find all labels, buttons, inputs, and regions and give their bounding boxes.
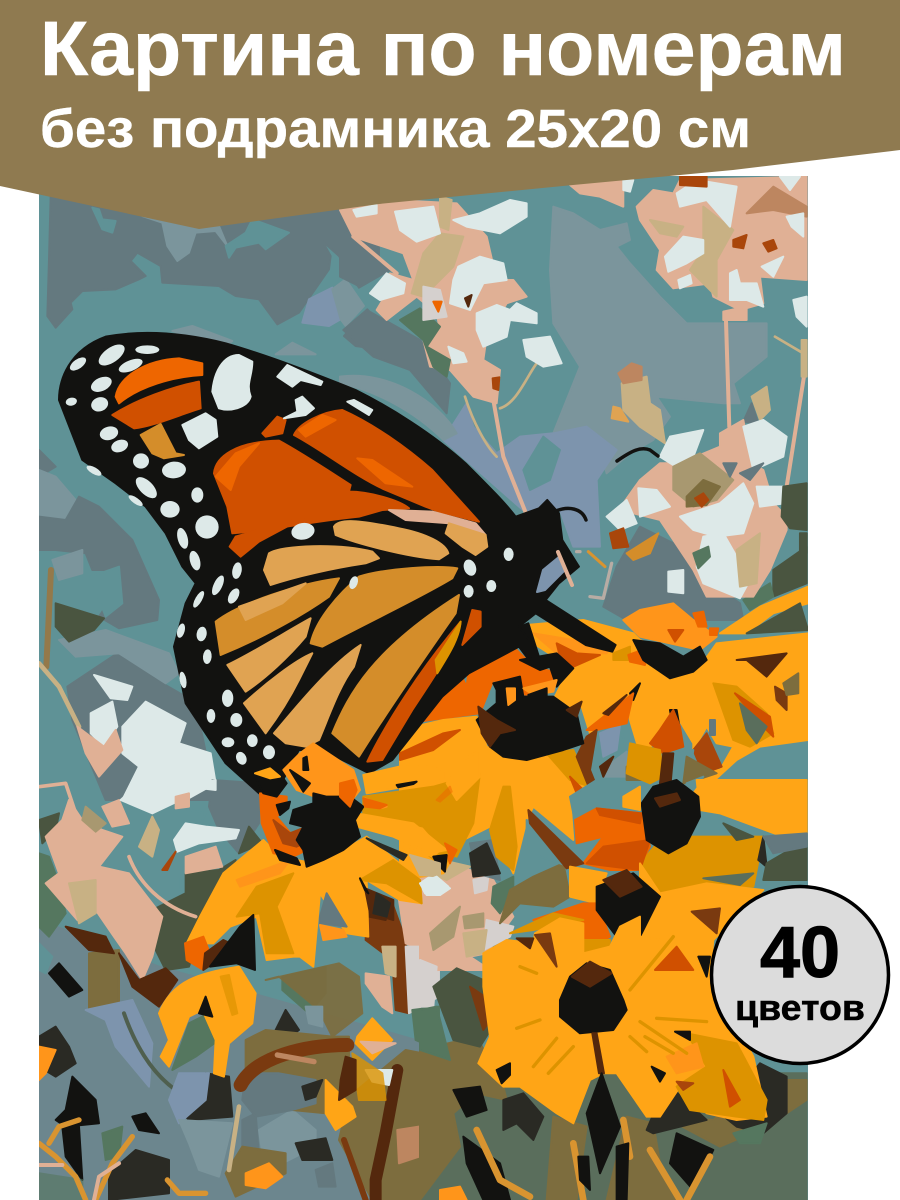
background: upper left grey patches [47, 196, 379, 354]
subtitle: без подрамника 25х20 см [40, 99, 751, 159]
top right flower petals [527, 587, 808, 797]
hindwing cells [216, 546, 481, 762]
flower: lower left petals [159, 967, 256, 1077]
badge label: цветов [735, 987, 865, 1028]
left flower petals [187, 743, 480, 967]
badge: 40 colours [712, 886, 888, 1064]
petal gaps [587, 693, 722, 790]
lower right blossom cluster [577, 420, 807, 598]
centre flower petals [400, 717, 603, 880]
flowers: lower right cluster [478, 780, 807, 1173]
top right blossom cluster [570, 177, 807, 327]
badge number: 40 [760, 913, 840, 993]
wing white spots [65, 340, 514, 766]
badge circle [712, 886, 888, 1064]
background: left middle patches and blossom [39, 450, 216, 800]
left flower detail [253, 757, 448, 920]
flower: left under butterfly [185, 743, 480, 970]
large flower petals [478, 908, 767, 1173]
left blossom cluster [340, 197, 562, 515]
forewing orange cells [112, 358, 479, 557]
centre flower orange heart [424, 648, 554, 722]
butterfly [59, 333, 616, 800]
left flower orange ring [260, 793, 307, 857]
title: Картина по номерам [40, 6, 846, 92]
painting teal background [39, 176, 808, 1200]
top right flower centre [633, 640, 707, 678]
butterfly body and wing outline [59, 333, 616, 800]
background gap teal [599, 726, 642, 781]
foreground bottom right foliage and blossoms [420, 840, 807, 1200]
flowers: top right and centre [400, 587, 808, 880]
middle flower petals [510, 780, 807, 977]
forewing pale cells [334, 510, 487, 559]
sky patches [340, 207, 807, 620]
centre flower black disk [477, 623, 583, 760]
painting: butterfly on flowers [39, 176, 808, 1200]
left lower flower disk [185, 915, 255, 970]
butterfly leg gap and antennae [537, 449, 658, 592]
header banner [0, 0, 900, 229]
foreground bottom left foliage [39, 780, 439, 1200]
stems and bud [612, 307, 807, 487]
background: upper right sky and blossoms [340, 177, 807, 620]
